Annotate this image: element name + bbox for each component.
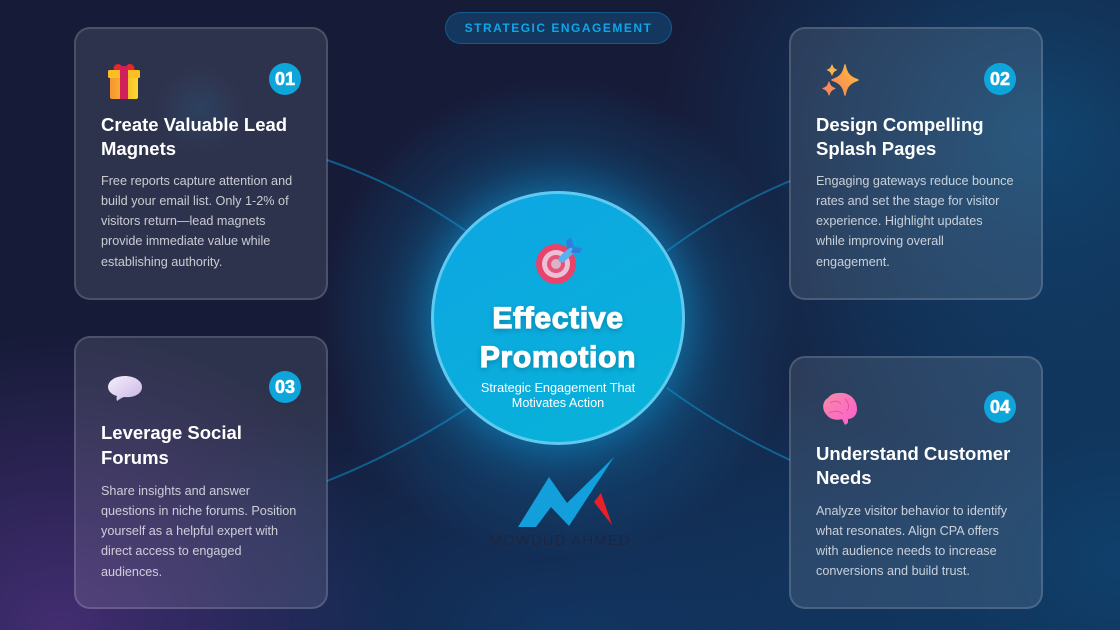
badge: strategic engagement — [445, 12, 672, 44]
logo wordmark: MOWDUD AHMED — [489, 532, 631, 549]
heading — [101, 114, 287, 159]
card 01: lead magnets — [74, 27, 328, 300]
heading: Splash Pages — [816, 138, 936, 159]
heading: Magnets — [101, 138, 176, 159]
badge number 01 — [269, 63, 301, 95]
central hub circle — [431, 191, 685, 445]
description: Free reports capture attention and — [101, 174, 292, 188]
description: Share insights and answer — [101, 484, 250, 498]
description — [101, 174, 292, 269]
icon: brain — [823, 392, 857, 425]
description: experience. Highlight updates — [816, 214, 983, 228]
description: with audience needs to increase — [816, 544, 997, 558]
icon: speech bubble — [108, 376, 142, 401]
description: Analyze visitor behavior to identify — [816, 504, 1007, 518]
heading: Forums — [101, 446, 169, 468]
icon: target with dart — [536, 237, 582, 284]
description: Engaging gateways reduce bounce — [816, 174, 1013, 188]
description: engagement. — [816, 255, 890, 269]
heading: effective promotion — [478, 302, 637, 374]
description: while improving overall — [816, 234, 944, 248]
heading — [816, 442, 1010, 488]
logo mark — [518, 457, 614, 527]
description: direct access to engaged — [101, 544, 242, 558]
heading — [816, 114, 984, 159]
heading: Create Valuable Lead — [101, 114, 287, 134]
heading: effective promotion: Promotion — [480, 341, 636, 374]
description: questions in niche forums. Position — [101, 504, 296, 518]
description: visitors return—lead magnets — [101, 214, 265, 228]
description — [816, 504, 1007, 578]
badge number 04: 04 — [990, 397, 1010, 417]
description: establishing authority. — [101, 255, 222, 269]
badge number 04 — [984, 391, 1016, 423]
description: yourself as a helpful expert with — [101, 524, 278, 538]
heading: Understand Customer — [816, 442, 1010, 464]
description: what resonates. Align CPA offers — [816, 524, 999, 538]
description: conversions and build trust. — [816, 564, 970, 578]
badge number 02 — [984, 63, 1016, 95]
heading: effective promotion: Effective — [492, 302, 624, 335]
badge number 01: 01 — [275, 69, 295, 89]
description: provide immediate value while — [101, 234, 270, 248]
badge: strategic engagement: STRATEGIC ENGAGEMENT — [465, 21, 652, 35]
card 02: splash pages — [789, 27, 1043, 300]
heading: Design Compelling — [816, 114, 984, 134]
logo: mowdud ahmed — [489, 457, 631, 549]
description — [101, 484, 296, 579]
icon: gift — [108, 64, 140, 99]
heading — [101, 422, 242, 468]
heading: Needs — [816, 467, 872, 488]
heading: Leverage Social — [101, 422, 242, 443]
card 03: social forums — [74, 336, 328, 609]
card 04: customer needs — [789, 356, 1043, 609]
badge number 02: 02 — [990, 69, 1010, 89]
description: build your email list. Only 1-2% of — [101, 194, 289, 208]
description — [816, 174, 1013, 269]
description: rates and set the stage for visitor — [816, 194, 999, 208]
badge number 03 — [269, 371, 301, 403]
description: audiences. — [101, 565, 162, 579]
subtitle: Strategic Engagement That — [481, 381, 635, 395]
icon: sparkles — [822, 64, 859, 96]
subtitle: Motivates Action — [512, 396, 604, 410]
badge number 03: 03 — [275, 377, 295, 397]
subtitle — [481, 381, 636, 410]
